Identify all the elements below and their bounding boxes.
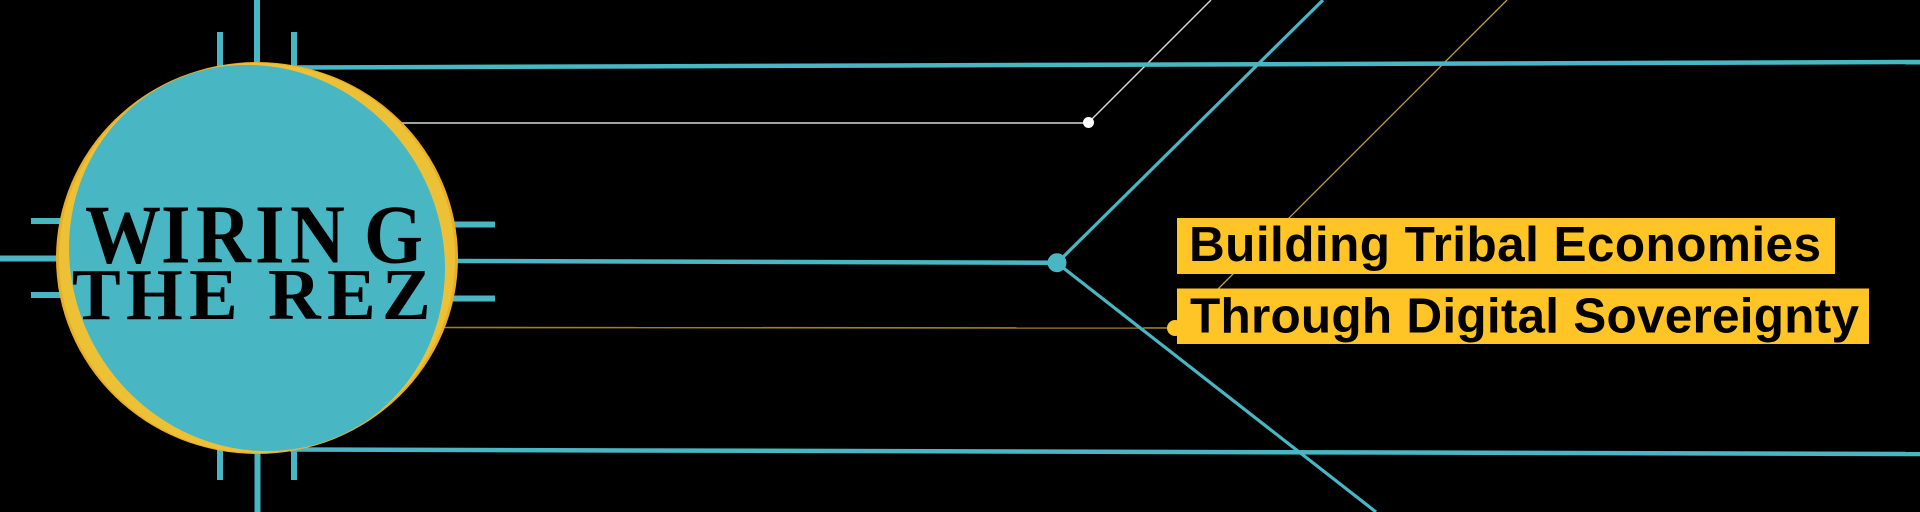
logo title: [72, 189, 431, 335]
subtitle line 2: Through Digital Sovereignty: [1190, 288, 1859, 344]
middle teal line with branching node: [450, 0, 1376, 512]
gold connector dot: [1167, 320, 1183, 336]
bottom teal line: [290, 450, 1920, 454]
thin white circuit line with node: [395, 0, 1211, 128]
top teal line: [290, 62, 1920, 68]
logo circle: [0, 0, 523, 512]
radiating ticks around circle: [0, 0, 495, 512]
logo title: THE REZ: [72, 254, 431, 335]
thin gold circuit line: [440, 0, 1507, 332]
subtitle line 1: Building Tribal Economies: [1189, 217, 1821, 272]
logo title: WIRING: [85, 189, 423, 281]
